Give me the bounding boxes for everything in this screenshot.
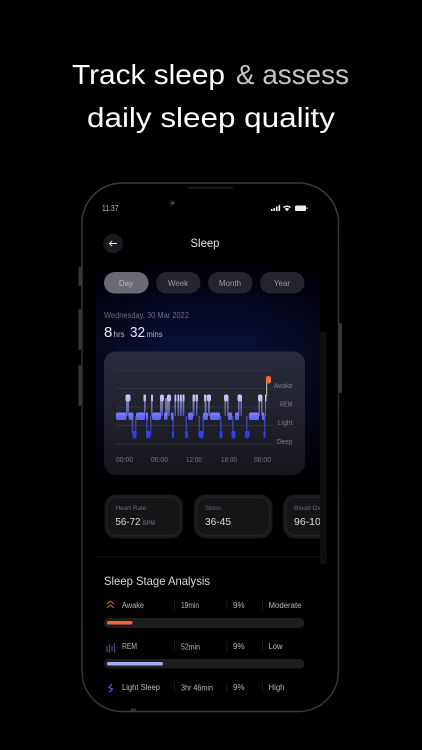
- title: Track sleep: [72, 59, 225, 90]
- row: light sleep: 9%: [233, 683, 245, 692]
- infographic canvas: [72, 64, 348, 712]
- x axis labels: [116, 457, 271, 464]
- panel: sleep stages chart: [104, 352, 305, 475]
- metric cards: [104, 494, 320, 538]
- row: REM: Low: [268, 642, 283, 651]
- status bar time: 11:37: [102, 204, 119, 213]
- top speaker: [188, 186, 233, 189]
- x axis labels: 00:00: [254, 457, 271, 464]
- row: light sleep: [109, 682, 284, 692]
- row: awake: 9%: [233, 601, 245, 610]
- tab: month: Month: [219, 279, 241, 288]
- tab: year: [260, 272, 304, 294]
- card: stress: Stress: [205, 505, 222, 512]
- row: light sleep: High: [268, 683, 284, 692]
- card: heart rate: Heart Rate: [116, 505, 147, 512]
- back button: [103, 234, 123, 253]
- y axis labels: Light: [278, 420, 293, 427]
- icon: awake chevrons: [107, 601, 114, 608]
- x axis labels: 12:00: [186, 457, 202, 464]
- row: REM: 52min: [181, 642, 200, 652]
- phone frame: [82, 183, 338, 712]
- sleep duration: [104, 324, 162, 341]
- phone side buttons: [78, 267, 342, 406]
- sleep duration: 8: [104, 324, 112, 341]
- y axis labels: [274, 383, 293, 446]
- x axis labels: 06:00: [151, 457, 168, 464]
- row: light sleep: 3hr 46min: [181, 684, 213, 692]
- date: Wednesday, 30 Mar 2022: [104, 311, 190, 320]
- row: awake: Moderate: [268, 601, 302, 610]
- sleep duration: mins: [146, 330, 162, 339]
- x axis labels: 18:00: [221, 457, 237, 464]
- sleep duration: 32: [130, 324, 145, 341]
- row: light sleep: Light Sleep: [122, 683, 161, 692]
- section heading: Sleep Stage Analysis: [104, 574, 210, 588]
- card: blood oxygen: 96-100%: [294, 516, 336, 528]
- card: stress: 36-45: [205, 516, 231, 528]
- screen glow background: [96, 262, 320, 492]
- scroll strip: [320, 332, 327, 564]
- card: blood oxygen: [283, 494, 320, 538]
- tab: month: [208, 272, 252, 294]
- card: blood oxygen: Blood Oxygen: [294, 505, 335, 512]
- sleep stage blocks: [116, 394, 266, 438]
- period tabs: [104, 272, 304, 294]
- status icons: [271, 205, 308, 211]
- title: & assess: [236, 59, 349, 90]
- row: awake: Awake: [122, 601, 145, 610]
- tab: day: Day: [119, 279, 133, 288]
- row: awake: 19min: [181, 601, 199, 610]
- title: daily sleep quality: [87, 102, 335, 133]
- icon: REM waves: [107, 643, 114, 653]
- icon: light sleep bolt: [109, 684, 112, 692]
- row: REM: REM: [122, 642, 137, 651]
- screen heading: Sleep: [190, 236, 220, 250]
- row: REM: [104, 641, 304, 668]
- phone mockup: [78, 183, 362, 712]
- title: [72, 59, 349, 133]
- y axis labels: Deep: [277, 439, 293, 446]
- chart grid lines: [116, 370, 271, 444]
- x axis labels: 00:00: [116, 457, 133, 464]
- tab: week: [156, 272, 200, 294]
- y axis labels: REM: [280, 402, 293, 408]
- tab: year: Year: [274, 279, 290, 288]
- row: REM: 9%: [233, 642, 245, 651]
- sleep stage connectors: [126, 398, 266, 434]
- card: heart rate: BPM: [143, 521, 155, 527]
- card: heart rate: 56-72: [116, 516, 141, 528]
- tab: week: Week: [168, 279, 189, 288]
- tab: day: [104, 272, 148, 294]
- card: stress: [194, 494, 272, 538]
- front camera: [168, 200, 176, 206]
- awake marker: [266, 376, 271, 396]
- card: heart rate: [104, 494, 183, 538]
- row: awake: [104, 600, 304, 628]
- bottom port mark: [131, 708, 136, 712]
- sleep duration: hrs: [114, 330, 125, 339]
- y axis labels: Awake: [274, 383, 293, 390]
